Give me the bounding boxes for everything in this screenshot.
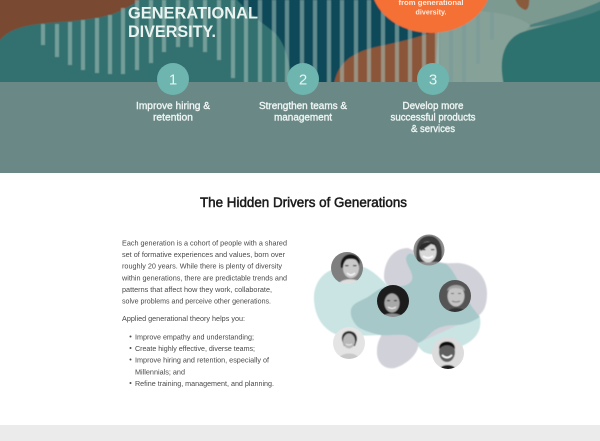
benefit 3 [390,63,476,135]
bullet list: Create highly effective, diverse teams; [135,344,255,353]
intro paragraph [121,238,287,306]
benefit 3 label: successful products [390,112,476,124]
applied theory line: Applied generational theory helps you: [122,314,245,323]
faint stripes on sage [449,0,494,90]
abstract shape: brown lobe [334,32,438,82]
callout text: diversity. [416,10,447,16]
benefit 3 label [390,100,476,135]
bullet list [130,332,274,388]
number badge 3: 3 [429,72,437,88]
bullet list: Improve hiring and retention, especially of [135,356,270,364]
intro paragraph: solve problems and perceive other generations. [122,296,271,306]
intro paragraph: roughly 20 years. While there is plenty of diversity [122,262,282,270]
intro paragraph: Each generation is a cohort of people with a shared [122,238,287,248]
bullet list: Millennials; and [135,368,185,376]
benefit 2 label [259,100,347,124]
intro paragraph: set of formative experiences and values, born over [122,250,285,259]
benefit 1 label: retention [153,112,193,124]
lower hero panel [0,82,600,173]
abstract shape: dark navy [237,0,429,82]
abstract shape: grey-green [441,12,528,82]
intro paragraph: patterns that affect how they work, collaborate, [122,285,272,294]
portrait 1 [331,252,363,284]
portrait 2 [414,234,444,266]
bullet list: Improve empathy and understanding; [135,332,254,342]
illustration: people and blobs [314,233,487,371]
benefit 3 label: & services [411,123,455,135]
hero title [128,4,258,41]
portrait 5 [333,327,365,359]
number badge 2: 2 [299,72,307,88]
orange callout shape [371,0,491,33]
abstract shape: teal blob right [501,10,600,82]
callout text: from generational [398,0,464,7]
abstract shape: brown top left [0,0,140,41]
benefit 1 label: Improve hiring & [136,100,210,112]
portrait 6 [432,337,464,369]
abstract shape: sage right [436,0,600,65]
benefit 2 label: Strengthen teams & [259,100,347,112]
hero title: GENERATIONAL [128,4,258,22]
section heading: The Hidden Drivers of Generations [200,195,407,210]
hero background [0,0,600,82]
stripes [41,0,439,90]
benefit 2 label: management [274,112,332,124]
bullet list: Refine training, management, and planning. [135,379,274,388]
benefit 1 [136,63,210,124]
benefit 2 [259,63,347,124]
portrait 3 [377,285,409,317]
benefit 3 label: Develop more [402,100,464,112]
callout text [398,0,464,16]
hero title: DIVERSITY. [128,22,216,41]
overlapping blobs [314,248,487,368]
abstract shape: dark band [530,0,600,27]
portrait 4 [439,280,471,312]
footer band [0,425,600,441]
intro paragraph: within generations, there are predictable trends and [121,274,287,282]
abstract shape: brown fragment [514,0,529,10]
benefit 1 label [136,100,210,124]
number badge 1: 1 [169,72,177,88]
